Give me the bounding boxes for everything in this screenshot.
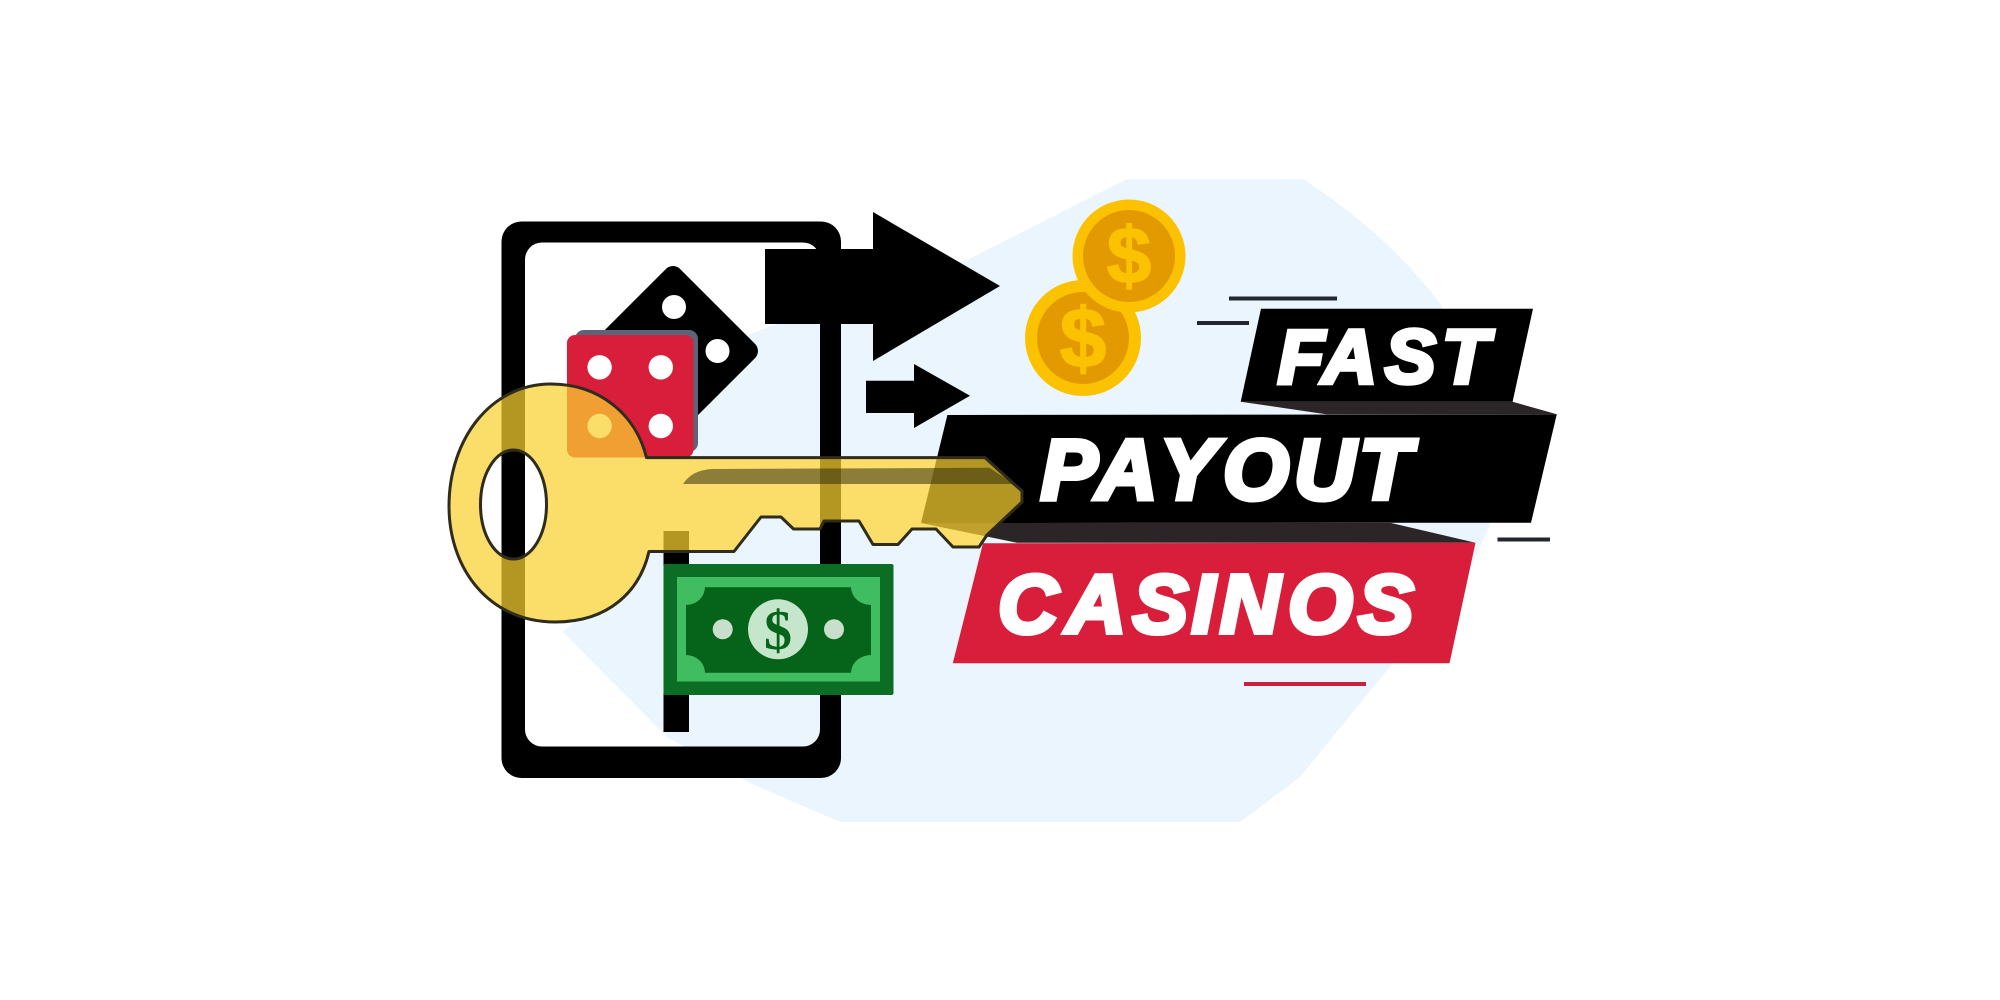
speed line: second: [1197, 321, 1249, 325]
phone notch bar: [664, 531, 689, 732]
icon: black die: [584, 262, 762, 440]
key underlay: [449, 384, 1022, 622]
icon: large arrow: [765, 212, 1000, 361]
key groove shading: [683, 468, 1014, 484]
speed line: red: [1244, 682, 1366, 686]
icon: upper gold coin: [1072, 200, 1186, 312]
CASINOS banner: [953, 543, 1476, 663]
FAST banner: [1241, 309, 1533, 402]
PAYOUT banner fold: [921, 523, 1476, 543]
FAST banner fold: [1241, 402, 1557, 414]
CASINOS banner: CASINOS: [998, 558, 1414, 650]
PAYOUT banner: PAYOUT: [1041, 423, 1417, 518]
icon: upper gold coin: $: [1107, 211, 1151, 300]
icon: small arrow: [866, 364, 970, 428]
icon: lower gold coin: $: [1060, 291, 1106, 385]
speed line: top: [1229, 296, 1337, 300]
background blob: [563, 179, 1490, 822]
icon: dollar banknote: [664, 564, 894, 695]
phone frame: [502, 221, 841, 778]
PAYOUT banner: [921, 414, 1557, 523]
FAST banner: FAST: [1278, 315, 1494, 400]
speed line: right: [1498, 538, 1550, 542]
icon: dollar banknote: $: [764, 600, 792, 662]
icon: lower gold coin: [1025, 280, 1141, 396]
icon: red die: [567, 330, 698, 458]
icon: translucent yellow key: [449, 384, 1022, 622]
